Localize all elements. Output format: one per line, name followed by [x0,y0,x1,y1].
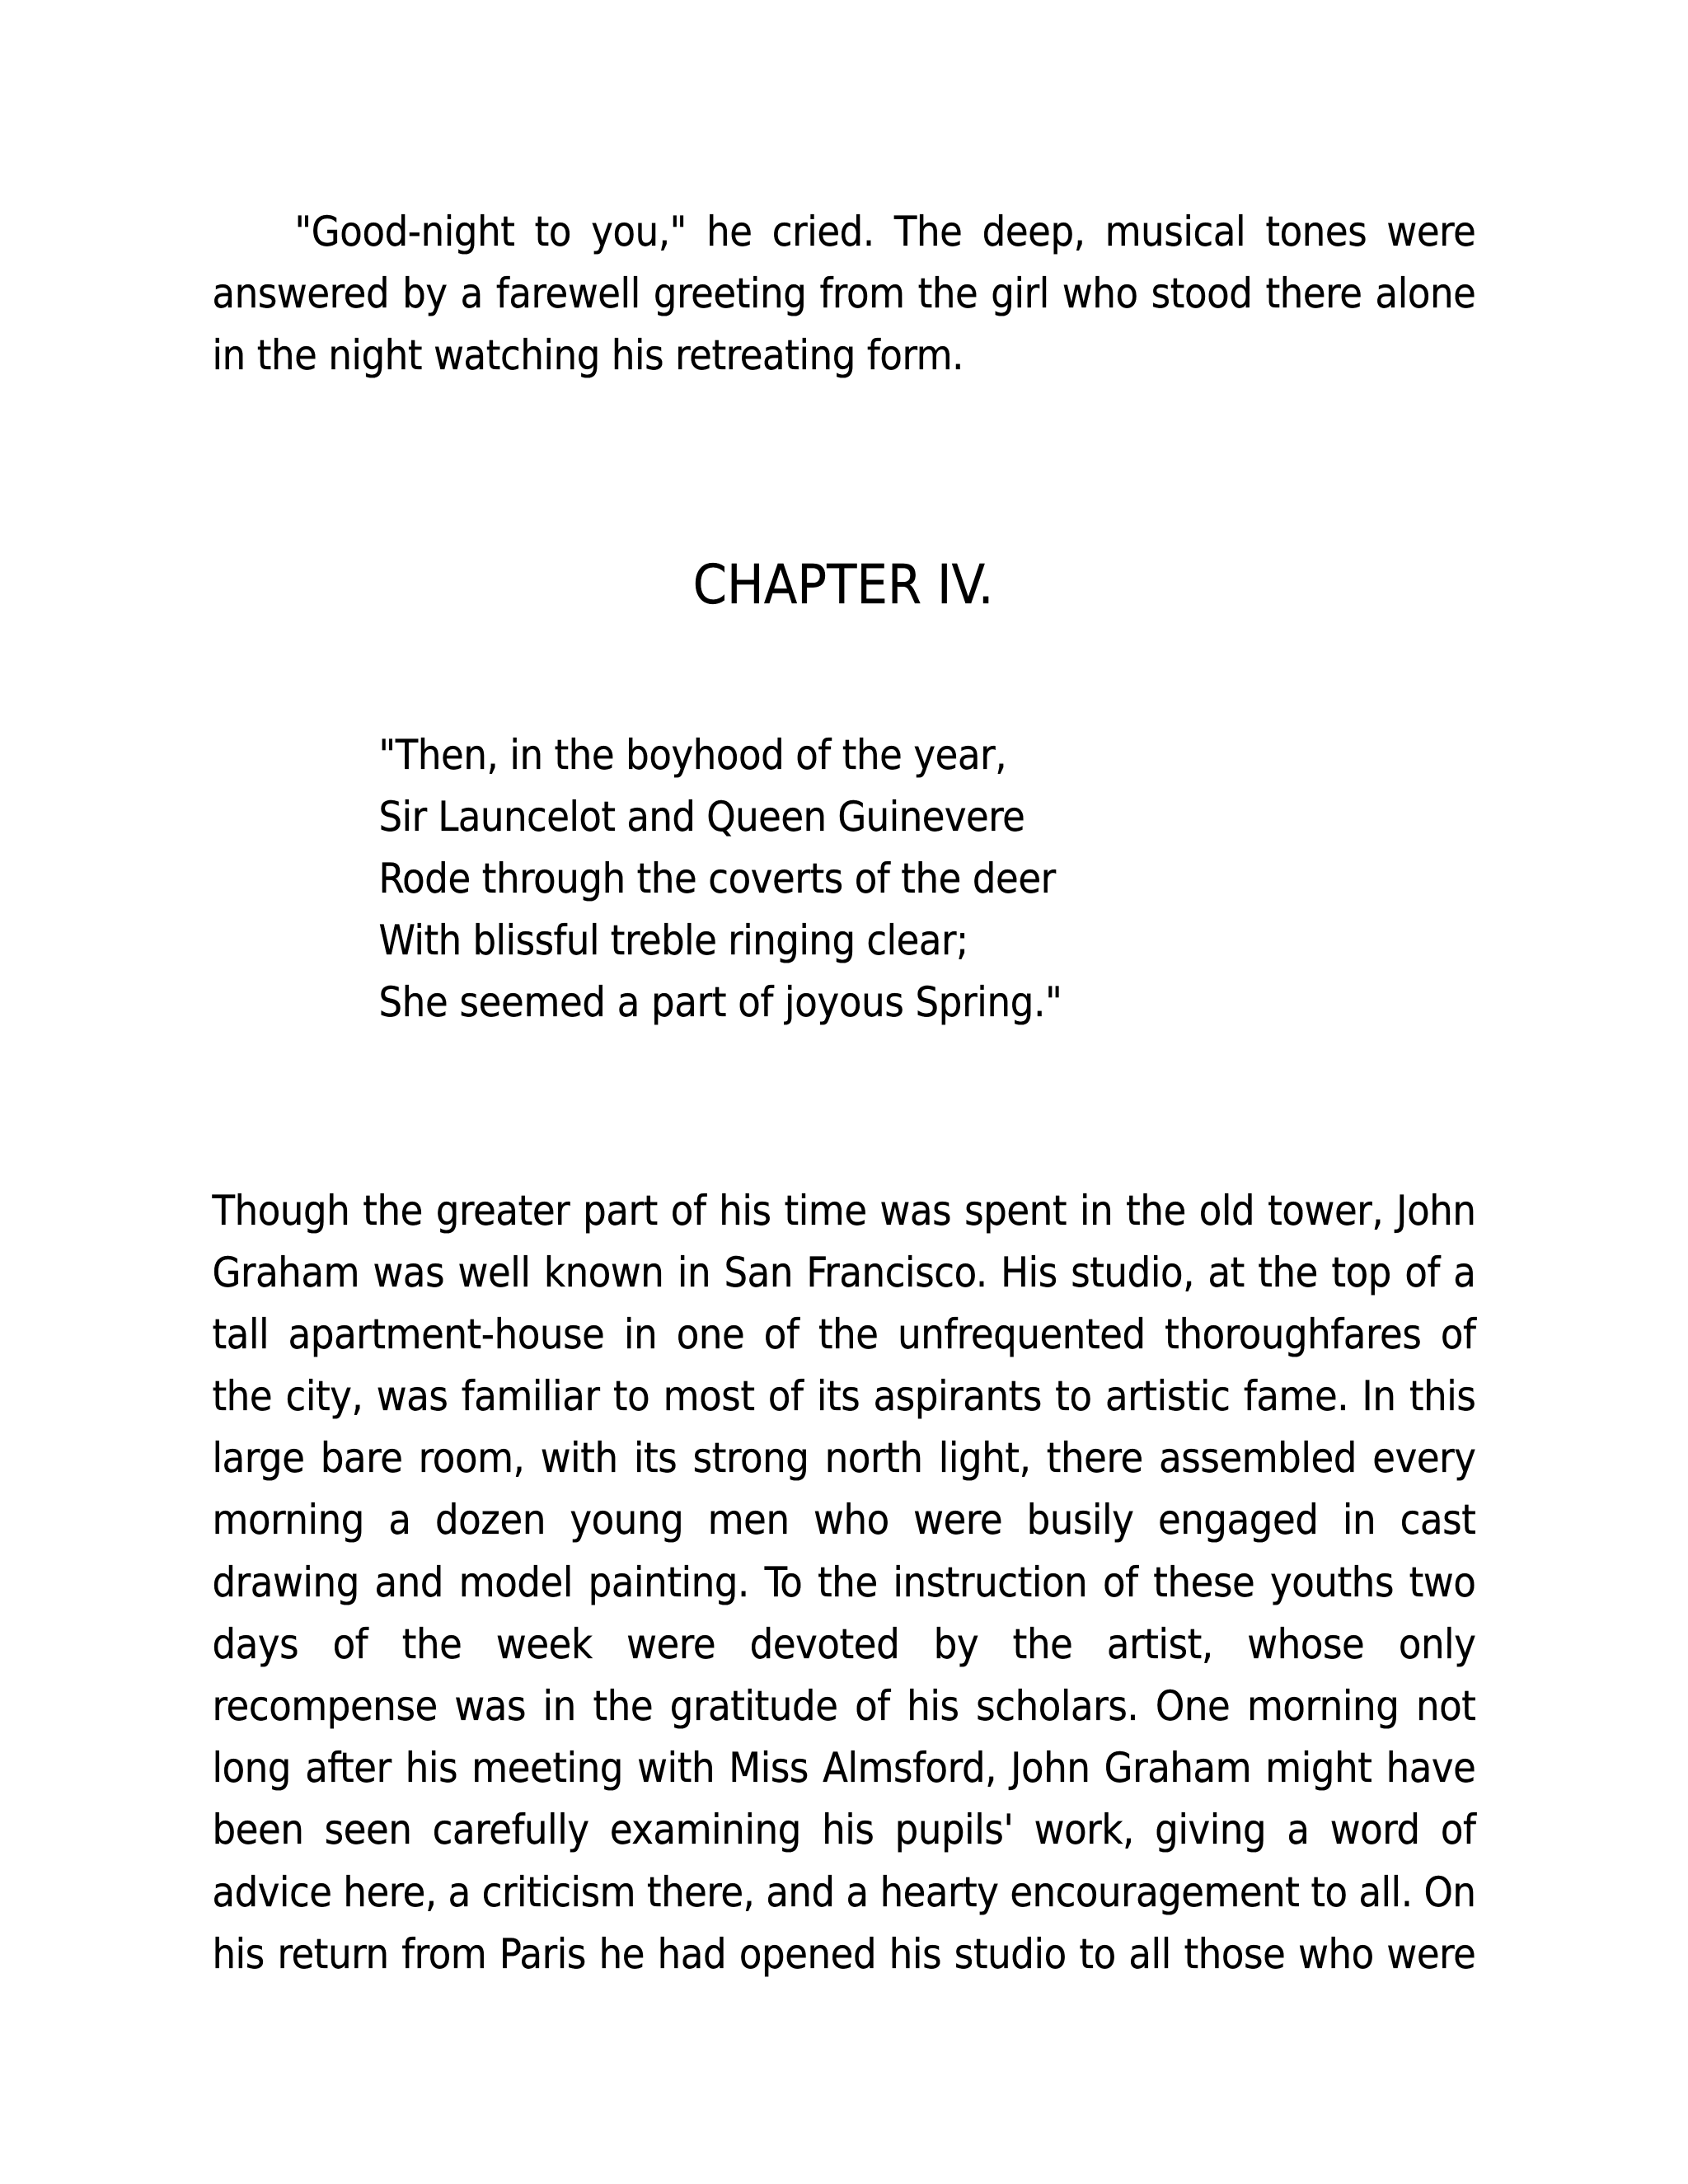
text block: main paragraph: morning a dozen young men who were busily engaged in cast [213,1496,1475,1544]
text block: poem epigraph: "Then, in the boyhood of the year, [379,730,1006,778]
text block: poem epigraph: Rode through the coverts of the deer [379,855,1056,902]
text block: main paragraph: drawing and model painting. To the instruction of these youths two [213,1558,1475,1606]
text block: main paragraph: days of the week were devoted by the artist, whose only [213,1620,1475,1668]
text block: main paragraph: been seen carefully examining his pupils' work, giving a word of [213,1806,1475,1854]
text block: main paragraph: long after his meeting with Miss Almsford, John Graham might have [213,1744,1475,1792]
text block: main paragraph: Though the greater part of his time was spent in the old tower, John [213,1187,1475,1235]
text block: main paragraph: recompense was in the gratitude of his scholars. One morning not [213,1682,1475,1730]
text block: main paragraph: large bare room, with its strong north light, there assembled every [213,1434,1475,1482]
text block: opening paragraph: answered by a farewell greeting from the girl who stood there alone [213,269,1475,317]
heading: chapter title: CHAPTER IV. [693,552,993,616]
text block: opening paragraph [213,208,1475,379]
text block: poem epigraph: Sir Launcelot and Queen Guinevere [379,793,1025,841]
text block: main paragraph: his return from Paris he had opened his studio to all those who were [213,1930,1475,1978]
text block: main paragraph: advice here, a criticism there, and a hearty encouragement to all. On [213,1868,1475,1916]
text block: poem epigraph [379,730,1062,1026]
text block: poem epigraph: With blissful treble ringing clear; [379,916,968,964]
text block: main paragraph: the city, was familiar to most of its aspirants to artistic fame. In this [213,1372,1475,1420]
text block: main paragraph: tall apartment-house in one of the unfrequented thoroughfares of [213,1310,1475,1358]
text block: poem epigraph: She seemed a part of joyous Spring." [379,978,1062,1026]
text block: main paragraph: Graham was well known in San Francisco. His studio, at the top of a [213,1249,1475,1296]
text block: main paragraph [212,1187,1477,1978]
text block: opening paragraph: "Good-night to you," he cried. The deep, musical tones were [295,208,1475,255]
text block: opening paragraph: in the night watching his retreating form. [213,331,964,379]
